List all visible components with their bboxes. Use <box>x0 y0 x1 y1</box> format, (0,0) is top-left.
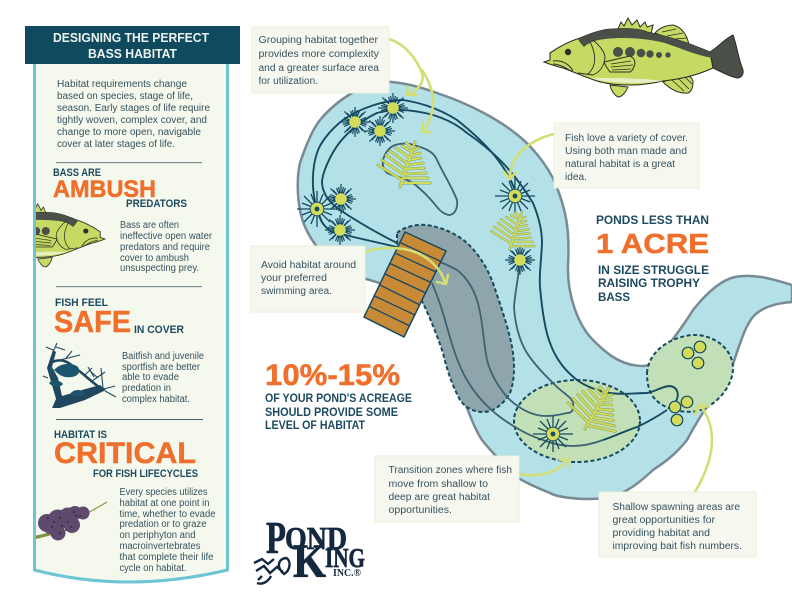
heading: safe: FISH FEEL <box>55 297 108 309</box>
callout: spawning: Shallow spawning areas are <box>612 502 740 513</box>
swimming area <box>397 225 514 412</box>
callout: grouping: provides more complexity <box>258 49 379 60</box>
logo: INC.® <box>333 568 362 579</box>
safe text: sportfish are better <box>122 362 201 373</box>
arrows <box>365 39 712 492</box>
intro text: change to more open, navigable <box>57 127 201 138</box>
callout: spawning <box>599 492 756 557</box>
critical text: on periphyton and <box>120 530 196 541</box>
callout: variety: idea. <box>565 172 587 183</box>
stat: 10-15 percent <box>265 359 412 432</box>
panel body <box>34 60 228 582</box>
ambush text: ineffective open water <box>120 231 213 242</box>
logo: ING <box>325 543 365 573</box>
panel header <box>25 26 240 64</box>
stat: 1 acre: PONDS LESS THAN <box>596 215 709 227</box>
callout: swimming: your preferred <box>261 273 327 284</box>
pond shape <box>298 82 792 499</box>
big bass illustration <box>544 18 743 97</box>
critical text: Every species utilizes <box>120 487 208 498</box>
stat: 1 acre: 1 ACRE <box>596 228 709 259</box>
transition zone <box>514 380 640 462</box>
callout: transition <box>375 456 519 522</box>
ambush text: unsuspecting prey. <box>120 263 199 274</box>
icon: branches with fish <box>43 343 116 408</box>
callout: swimming: Avoid habitat around <box>261 260 356 271</box>
callout: transition: opportunities. <box>388 505 452 516</box>
intro text <box>57 79 210 150</box>
critical text: that complete their life <box>120 552 214 563</box>
stat: 1 acre: IN SIZE STRUGGLE <box>598 265 709 277</box>
callout: variety: natural habitat is a great <box>565 159 675 170</box>
safe text: able to evade <box>122 372 179 383</box>
heading: ambush: BASS ARE <box>53 167 101 179</box>
critical text: predation or to graze <box>120 519 207 530</box>
callout: transition: move from shallow to <box>388 479 488 490</box>
logo: OND <box>285 520 347 556</box>
callout: grouping: for utilization. <box>258 76 318 87</box>
stat: 1 acre: RAISING TROPHY <box>598 278 700 290</box>
critical text: time, whether to evade <box>120 509 216 520</box>
logo: P <box>266 513 286 563</box>
stat: 1 acre: BASS <box>598 292 630 304</box>
pond map <box>297 82 792 499</box>
logo <box>254 513 365 588</box>
stat: 10-15 percent: OF YOUR POND'S ACREAGE <box>265 393 412 405</box>
heading: ambush: PREDATORS <box>126 198 187 210</box>
logo: K <box>293 535 326 588</box>
stat: 1 acre <box>596 215 709 304</box>
heading <box>53 31 209 61</box>
intro text: based on species, stage of life, <box>57 91 193 102</box>
heading: safe: IN COVER <box>134 324 184 336</box>
ambush text: Bass are often <box>120 220 179 231</box>
heading: critical: CRITICAL <box>54 437 196 470</box>
star habitat structures <box>297 93 573 452</box>
ambush text: predators and require <box>120 242 210 253</box>
heading: critical <box>54 429 198 480</box>
stat: 10-15 percent: LEVEL OF HABITAT <box>265 420 365 432</box>
callout: variety <box>554 123 699 188</box>
intro text: season. Early stages of life require <box>57 103 210 114</box>
callout: variety: Fish love a variety of cover. <box>565 133 688 144</box>
critical text: macroinvertebrates <box>120 541 200 552</box>
icon: aquatic plant <box>36 502 107 540</box>
critical text: cycle on habitat. <box>120 563 186 574</box>
callout: spawning: improving bait fish numbers. <box>612 541 742 552</box>
callout: spawning: great opportunities for <box>612 515 716 526</box>
spawning circles <box>669 341 706 426</box>
critical text: habitat at one point in <box>120 498 210 509</box>
left panel <box>25 26 240 584</box>
logo fish emblem <box>254 558 290 584</box>
safe text <box>122 351 204 405</box>
heading: critical: FOR FISH LIFECYCLES <box>93 468 198 480</box>
callout: swimming: swimming area. <box>261 286 332 297</box>
ambush text <box>120 220 213 274</box>
callout: transition: Transition zones where fish <box>388 465 512 476</box>
heading: safe <box>54 297 184 339</box>
safe text: complex habitat. <box>122 394 190 405</box>
dock <box>364 232 446 337</box>
ambush text: cover to ambush <box>120 253 189 264</box>
safe text: Baitfish and juvenile <box>122 351 204 362</box>
heading: DESIGNING THE PERFECT <box>53 31 209 45</box>
spawning area <box>647 335 733 412</box>
callout: grouping: Grouping habitat together <box>258 35 379 46</box>
callout: variety: Using both man made and <box>565 146 687 157</box>
heading: critical: HABITAT IS <box>54 429 107 441</box>
heading: BASS HABITAT <box>88 47 177 61</box>
intro text: cover at later stages of life. <box>57 139 175 150</box>
callout: grouping: and a greater surface area <box>258 63 379 74</box>
callout: grouping <box>252 27 389 93</box>
intro text: tightly woven, complex cover, and <box>57 115 207 126</box>
heading: ambush: AMBUSH <box>53 176 156 203</box>
stat: 10-15 percent: 10%-15% <box>265 359 400 392</box>
callout: transition: deep are great habitat <box>388 492 490 503</box>
stat: 10-15 percent: SHOULD PROVIDE SOME <box>265 407 398 419</box>
heading: safe: SAFE <box>54 304 131 339</box>
callout: spawning: providing habitat and <box>612 528 710 539</box>
icon: small bass <box>36 203 106 268</box>
heading: ambush <box>53 167 187 210</box>
critical text <box>120 487 216 574</box>
intro text: Habitat requirements change <box>57 79 187 90</box>
callout: swimming <box>251 246 365 312</box>
safe text: predation in <box>122 383 171 394</box>
fern habitat structures <box>378 142 624 435</box>
contour lines <box>313 100 678 446</box>
